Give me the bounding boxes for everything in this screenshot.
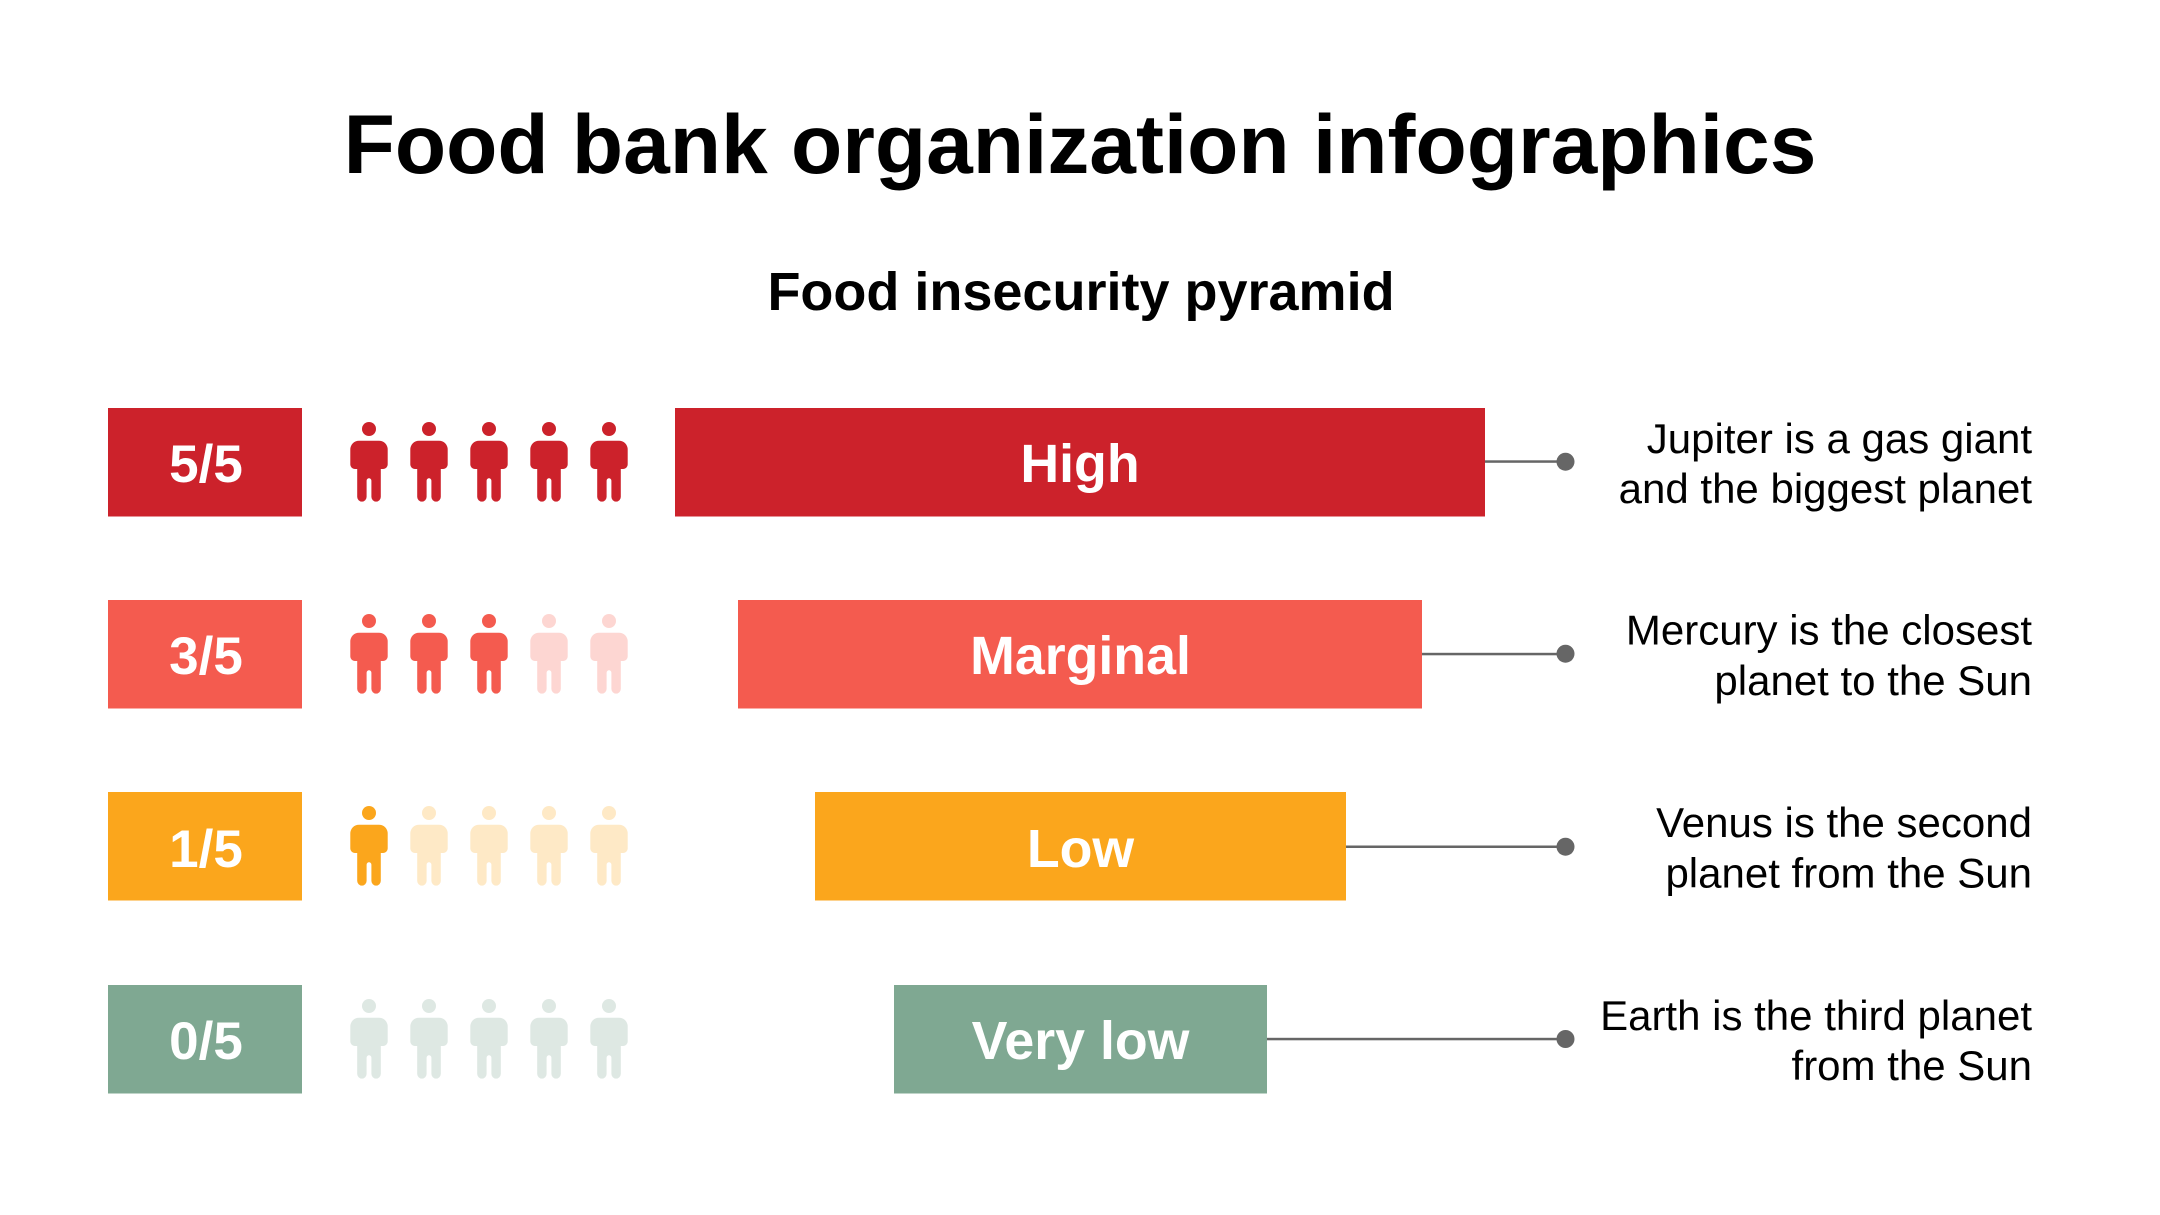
row: high: [108, 408, 2032, 516]
connector with dot: [1422, 645, 1574, 663]
row: low: [108, 792, 2032, 900]
bar: Marginal: [738, 600, 1422, 708]
connector with dot: [1267, 1030, 1574, 1048]
connector with dot: [1346, 838, 1574, 856]
people icons 5 of 5: [350, 422, 628, 502]
bar: High: High: [1020, 434, 1140, 494]
score badge 0/5: 0/5: [169, 1012, 243, 1071]
score badge 5/5: [108, 408, 302, 516]
bar: Low: [815, 792, 1346, 900]
description: Mercury: Mercury is the closest: [1626, 606, 2032, 654]
people icons 0 of 5: [350, 999, 628, 1079]
row: marginal: [108, 600, 2032, 708]
connector with dot: [1485, 453, 1574, 471]
score badge 1/5: 1/5: [169, 820, 243, 879]
bar: Low: Low: [1027, 819, 1134, 879]
subtitle: Food insecurity pyramid: [767, 262, 1395, 322]
people icons 1 of 5: [350, 806, 628, 886]
description: Jupiter: and the biggest planet: [1619, 465, 2032, 512]
bar: High: [675, 408, 1485, 516]
description: Mercury: planet to the Sun: [1714, 657, 2032, 704]
description: Venus: planet from the Sun: [1665, 850, 2032, 896]
people icons 3 of 5: [350, 614, 628, 694]
title: Food bank organization infographics: [344, 97, 1816, 191]
score badge 3/5: [108, 600, 302, 708]
description: Earth: from the Sun: [1792, 1042, 2032, 1089]
row: very low: [108, 985, 2032, 1094]
description: Earth: Earth is the third planet: [1600, 992, 2032, 1039]
bar: Marginal: Marginal: [970, 626, 1191, 686]
description: Jupiter: Jupiter is a gas giant: [1647, 415, 2032, 462]
score badge 5/5: 5/5: [169, 435, 243, 494]
score badge 3/5: 3/5: [169, 627, 243, 686]
bar: Very low: Very low: [972, 1011, 1190, 1071]
score badge 1/5: [108, 792, 302, 900]
bar: Very low: [894, 985, 1267, 1094]
description: Venus: Venus is the second: [1656, 799, 2032, 846]
score badge 0/5: [108, 985, 302, 1094]
